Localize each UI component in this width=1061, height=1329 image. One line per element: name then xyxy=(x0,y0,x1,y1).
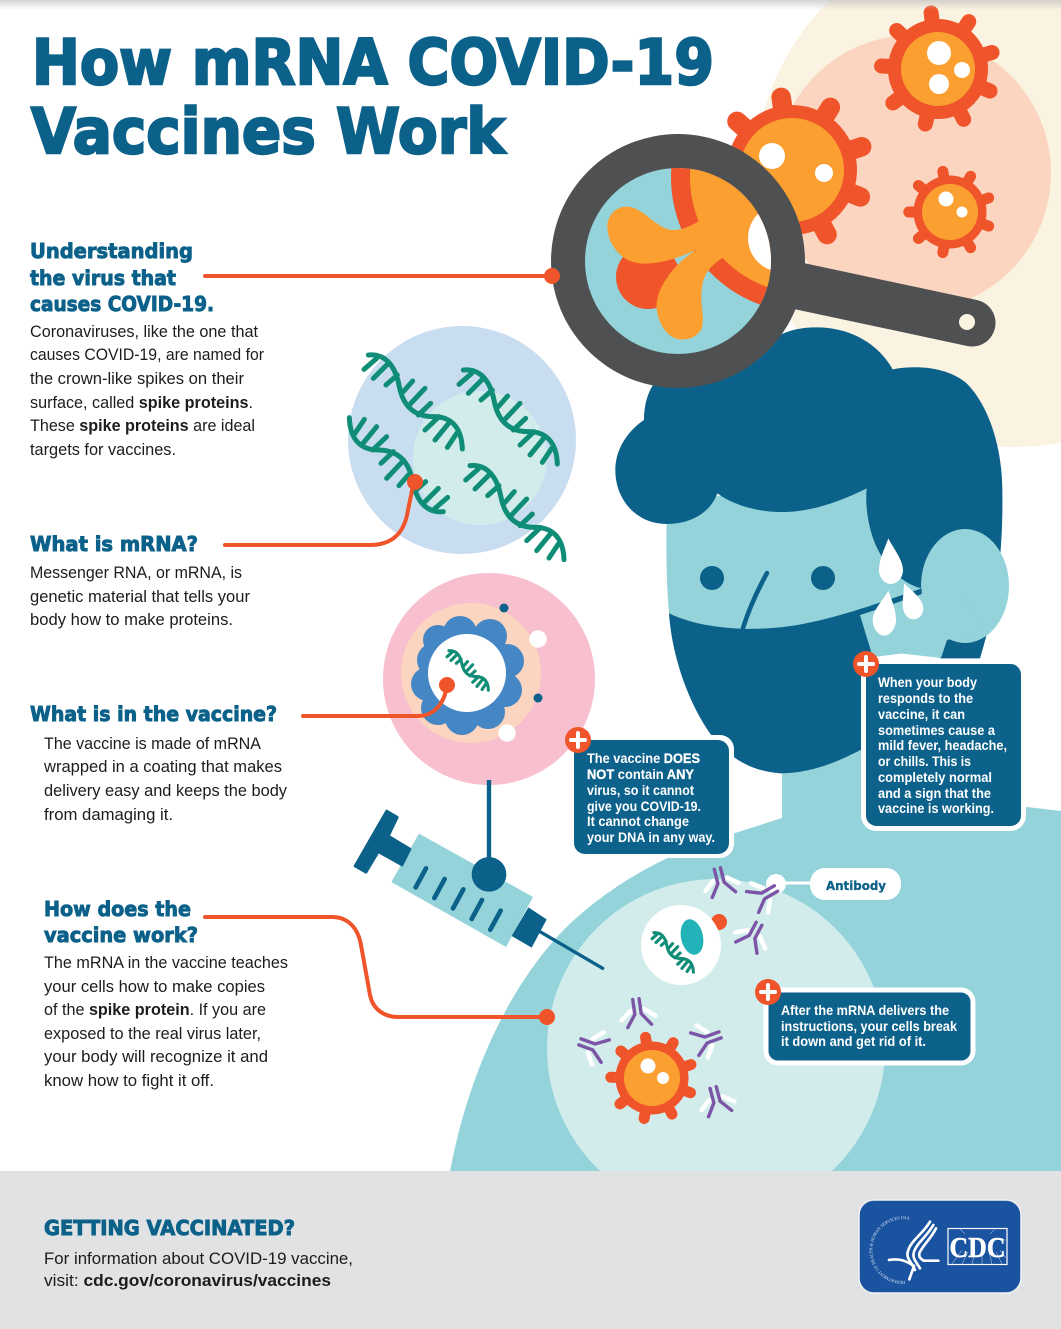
label: antibody: Antibody xyxy=(826,878,886,893)
footer text: GETTING VACCINATED? xyxy=(44,1216,295,1240)
body: coronaviruses: the crown-like spikes on their xyxy=(30,370,245,388)
title xyxy=(31,26,714,168)
icon: plus xyxy=(853,651,879,677)
body: vaccine coating: wrapped in a coating that makes xyxy=(43,758,282,776)
icon: large virus top right xyxy=(876,6,1000,128)
callout: side effects xyxy=(853,651,1024,828)
HHS eagle xyxy=(889,1222,938,1279)
body: vaccine coating: from damaging it. xyxy=(44,806,173,824)
HHS seal text: DEPARTMENT OF HEALTH & HUMAN SERVICES USA xyxy=(869,1216,910,1284)
logo: HHS and CDC xyxy=(858,1200,1022,1294)
body: coronaviruses: These spike proteins are ideal xyxy=(30,417,255,435)
callout: side effects: responds to the xyxy=(878,691,973,706)
heading: what is mRNA: What is mRNA? xyxy=(30,532,198,556)
callout: cells break down mRNA xyxy=(755,979,973,1063)
mRNA strands xyxy=(349,355,564,560)
person face xyxy=(666,480,930,680)
text block: what is in the vaccine xyxy=(30,702,288,824)
body: messenger RNA xyxy=(30,564,251,629)
icon: virus with antibodies xyxy=(574,997,737,1123)
callout: side effects: vaccine is working. xyxy=(878,801,994,816)
callout: side effects: When your body xyxy=(878,675,977,690)
callout: side effects: completely normal xyxy=(878,770,992,785)
callout: cells break down mRNA: instructions, your cells break xyxy=(781,1019,957,1034)
connector: how vaccine works xyxy=(205,917,555,1025)
heading: understanding the virus: causes COVID-19. xyxy=(30,292,214,316)
person body and neck xyxy=(450,700,1061,1172)
text block: what is mRNA xyxy=(30,532,251,629)
nose line xyxy=(743,573,767,628)
face mask xyxy=(669,588,922,773)
particle dots xyxy=(498,604,547,742)
callout: side effects: mild fever, headache, xyxy=(878,738,1007,753)
heading: understanding the virus: Understanding xyxy=(30,239,193,263)
magnifier handle xyxy=(780,282,975,330)
icon: small virus right xyxy=(903,164,997,257)
magnifying glass xyxy=(551,134,996,388)
callout: vaccine does not contain virus: virus, so it cannot xyxy=(587,783,694,798)
label: antibody xyxy=(810,868,901,900)
heading: how does the vaccine work: How does the xyxy=(44,897,191,921)
magnifier frame xyxy=(551,134,805,388)
connector: mRNA xyxy=(225,474,423,545)
body: coronaviruses: targets for vaccines. xyxy=(30,441,176,459)
title: Vaccines Work xyxy=(31,95,507,168)
small mRNA strand xyxy=(447,651,488,690)
top edge shadow xyxy=(0,0,1061,10)
body: coronaviruses xyxy=(30,323,265,459)
body: how vaccine teaches cells: your body will recognize it and xyxy=(44,1048,268,1066)
body: how vaccine teaches cells: exposed to the real virus later, xyxy=(44,1025,261,1043)
callout: side effects: and a sign that the xyxy=(878,786,991,801)
icon: syringe xyxy=(355,780,603,968)
cell circle xyxy=(547,879,884,1171)
body: how vaccine teaches cells xyxy=(44,954,288,1090)
peach background circle xyxy=(775,35,1051,311)
magnified spike protein xyxy=(585,168,771,354)
mRNA circle illustration xyxy=(348,326,576,560)
heading: understanding the virus: the virus that xyxy=(30,266,176,290)
footer band xyxy=(0,1171,1061,1329)
body: coronaviruses: causes COVID-19, are named for xyxy=(30,346,265,364)
connector: vaccine xyxy=(303,677,455,716)
icon: plus xyxy=(755,979,781,1005)
cream background circle xyxy=(753,0,1061,447)
connector: understanding to magnifier xyxy=(205,268,560,284)
heading: understanding the virus xyxy=(30,239,214,316)
body: messenger RNA: body how to make proteins. xyxy=(30,611,233,629)
antibodies near cell xyxy=(701,864,784,956)
body: messenger RNA: Messenger RNA, or mRNA, is xyxy=(30,564,242,582)
callout: cells break down mRNA: it down and get rid of it. xyxy=(781,1034,926,1049)
vaccine particle illustration xyxy=(383,573,595,785)
callout: vaccine does not contain virus: The vaccine DOES xyxy=(587,751,700,766)
body: how vaccine teaches cells: your cells how to make copies xyxy=(44,978,265,996)
heading: how does the vaccine work xyxy=(44,897,198,947)
cell with mRNA and nucleus xyxy=(641,905,727,985)
lipid coating flower xyxy=(411,616,524,735)
callout: vaccine does not contain virus: NOT contain ANY xyxy=(587,767,694,782)
body: how vaccine teaches cells: of the spike protein. If you are xyxy=(44,1001,266,1019)
heading: what is in the vaccine: What is in the vaccine? xyxy=(30,702,277,726)
person hair xyxy=(615,327,1002,658)
icon: plus xyxy=(565,727,591,753)
callout: vaccine does not contain virus: your DNA in any way. xyxy=(587,830,715,845)
person cheek and ear xyxy=(860,529,1009,658)
body: vaccine coating: The vaccine is made of mRNA xyxy=(44,735,261,753)
callout: side effects: vaccine, it can xyxy=(878,707,965,722)
body: messenger RNA: genetic material that tells your xyxy=(30,588,251,606)
footer text: visit: cdc.gov/coronavirus/vaccines xyxy=(44,1272,331,1290)
body: vaccine coating xyxy=(43,735,288,824)
icon: virus behind magnifier xyxy=(710,87,874,249)
callout: vaccine does not contain virus: It cannot change xyxy=(587,814,689,829)
text block: how does the vaccine work xyxy=(44,897,288,1090)
callout: side effects: sometimes cause a xyxy=(878,723,995,738)
body: vaccine coating: delivery easy and keeps the body xyxy=(44,782,288,800)
person eyes xyxy=(700,566,835,590)
antibodies around virus xyxy=(574,997,737,1118)
body: coronaviruses: surface, called spike proteins. xyxy=(30,394,253,412)
footer text xyxy=(44,1216,353,1290)
heading: how does the vaccine work: vaccine work? xyxy=(44,923,198,947)
title: How mRNA COVID-19 xyxy=(32,26,714,99)
body: how vaccine teaches cells: know how to fight it off. xyxy=(44,1072,214,1090)
body: how vaccine teaches cells: The mRNA in the vaccine teaches xyxy=(44,954,288,972)
antibody label connector xyxy=(766,874,820,894)
callout: side effects: or chills. This is xyxy=(878,754,971,769)
CDC mark: CDC xyxy=(950,1232,1006,1264)
footer text: For information about COVID-19 vaccine, xyxy=(44,1250,353,1268)
tear drops xyxy=(873,538,923,636)
callout: vaccine does not contain virus: give you COVID-19. xyxy=(587,799,701,814)
callout: cells break down mRNA: After the mRNA delivers the xyxy=(781,1003,949,1018)
person illustration xyxy=(450,327,1061,1172)
text block: understanding the virus xyxy=(30,239,265,459)
callout: vaccine does not contain virus xyxy=(565,727,734,858)
body: coronaviruses: Coronaviruses, like the one that xyxy=(30,323,258,341)
